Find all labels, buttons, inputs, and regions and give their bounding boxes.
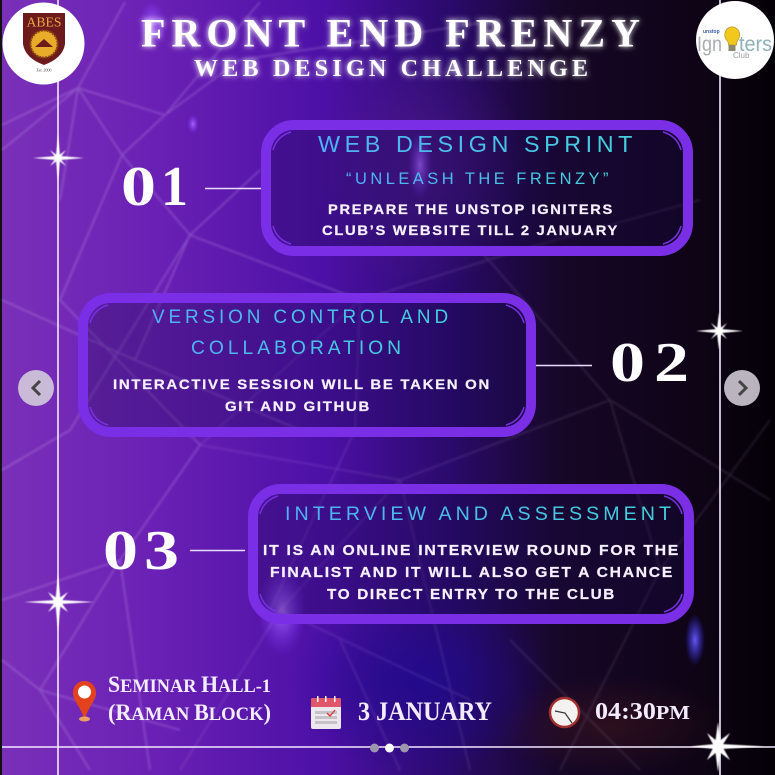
logo: Igniters Club: Ign [697, 33, 722, 56]
carousel dots [370, 744, 409, 752]
number 01 [121, 156, 188, 218]
step 02 [83, 298, 689, 432]
venue: SEMINAR HALL-1 [108, 672, 271, 697]
time: 04:30PM [595, 699, 690, 725]
number 01: 1 [161, 156, 188, 218]
icon: location pin [73, 681, 96, 722]
logo: ABES: Est. 2000 [36, 68, 52, 72]
logo: Igniters Club: unstop [703, 29, 720, 35]
star top left [33, 134, 84, 182]
panel: version control [83, 298, 531, 432]
description: TO DIRECT ENTRY TO THE CLUB [327, 587, 616, 603]
description: CLUB’S WEBSITE TILL 2 JANUARY [322, 222, 619, 238]
description: GIT AND GITHUB [225, 398, 371, 414]
venue: (RAMAN BLOCK) [108, 700, 271, 725]
star bottom right [690, 722, 765, 772]
panel: web design sprint [266, 125, 688, 251]
number 03: 0 [103, 520, 138, 582]
logo: Igniters Club [696, 1, 774, 79]
heading: WEB DESIGN SPRINT [318, 131, 637, 157]
panel: interview [253, 489, 689, 619]
heading: COLLABORATION [191, 337, 405, 359]
heading: INTERVIEW AND ASSESSMENT [285, 503, 675, 525]
description: IT IS AN ONLINE INTERVIEW ROUND FOR THE [263, 543, 680, 559]
next button [724, 370, 760, 406]
subtitle: WEB DESIGN CHALLENGE [194, 56, 588, 82]
previous button [18, 370, 54, 406]
logo: Igniters Club: Club [733, 51, 750, 60]
number 02: 0 [610, 332, 645, 394]
number 03: 3 [144, 520, 179, 582]
logo: ABES [2, 2, 84, 84]
number 02 [610, 332, 689, 394]
number 02: 2 [654, 332, 689, 394]
description: FINALIST AND IT WILL ALSO GET A CHANCE [270, 565, 674, 581]
description [263, 543, 680, 603]
logo: Igniters Club: ters [739, 33, 772, 56]
star lower left [24, 574, 94, 632]
date: 3 JANUARY [358, 697, 492, 726]
heading: VERSION CONTROL AND [152, 306, 452, 328]
number 03 [103, 520, 179, 582]
title: FRONT END FRENZY [141, 10, 640, 56]
step 03 [103, 489, 689, 619]
description: INTERACTIVE SESSION WILL BE TAKEN ON [113, 376, 491, 392]
icon: calendar [311, 696, 341, 729]
description: PREPARE THE UNSTOP IGNITERS [328, 201, 614, 217]
number 01: 0 [121, 156, 156, 218]
tagline: “UNLEASH THE FRENZY” [346, 170, 612, 188]
heading [152, 306, 452, 359]
description [322, 201, 619, 238]
star right [696, 312, 743, 350]
description [113, 376, 491, 414]
venue [108, 672, 271, 725]
step 01 [121, 125, 688, 251]
logo: ABES: ABES [26, 16, 62, 30]
icon: clock [550, 698, 579, 727]
